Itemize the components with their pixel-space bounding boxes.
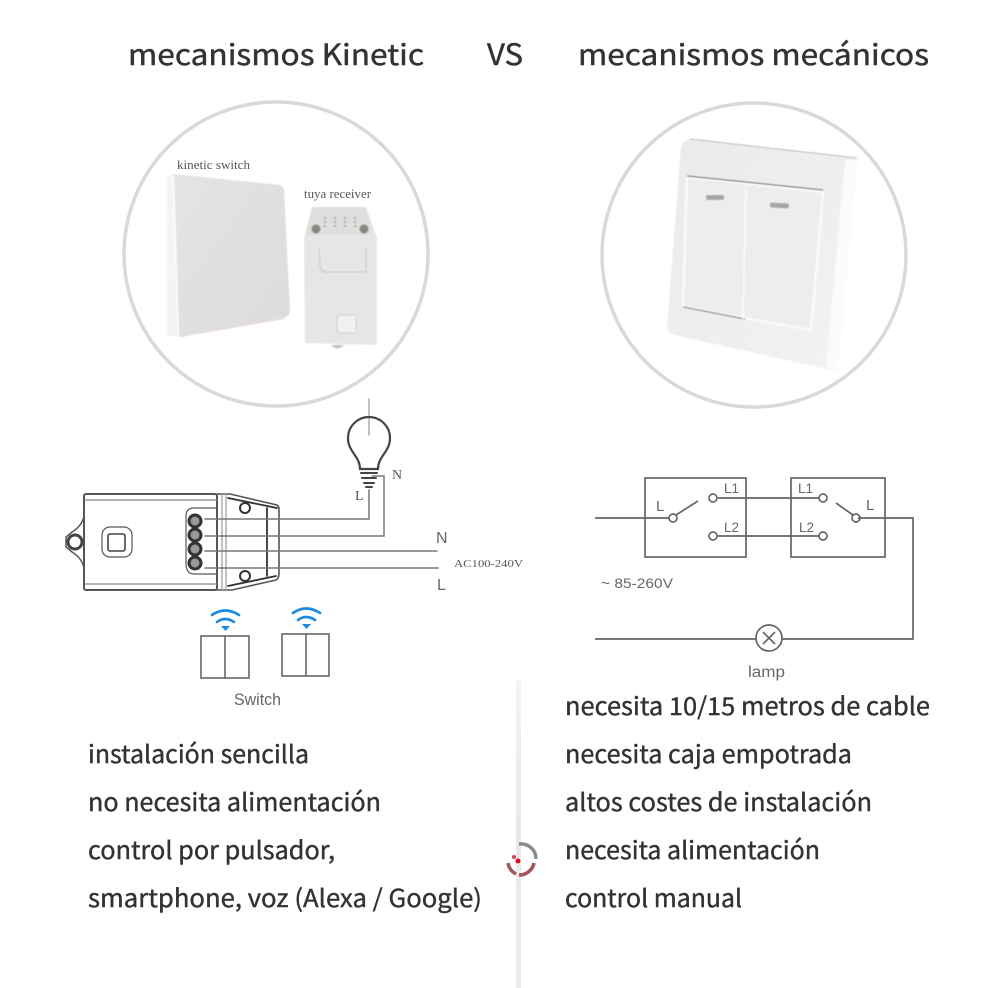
switch box left	[645, 478, 746, 557]
diagram: mechanical two-way wiring	[595, 478, 913, 651]
labels: switch terminals: L2	[724, 520, 739, 535]
label: Switch: Switch	[234, 691, 281, 709]
VS heading: VS	[487, 32, 523, 74]
icon: loading spinner	[508, 844, 536, 875]
label: bulb L: L	[355, 489, 364, 504]
text block: mechanical drawbacks: necesita caja empotrada	[565, 736, 852, 771]
panel: kinetic switch photo circle	[124, 102, 428, 406]
labels: switch terminals	[656, 481, 874, 535]
circuit wires	[595, 498, 913, 639]
labels: switch terminals: L2	[799, 520, 814, 535]
text block: kinetic benefits	[88, 736, 482, 915]
text block: mechanical drawbacks: altos costes de instalación	[565, 784, 872, 819]
icon: kinetic wall switch	[167, 174, 290, 337]
icon: light bulb	[348, 399, 390, 487]
text block: kinetic benefits: instalación sencilla	[88, 736, 309, 771]
text block: mechanical drawbacks: necesita alimentación	[565, 832, 820, 867]
labels: switch terminals: L1	[798, 481, 813, 496]
title: mecanismos mecánicos: mecanismos mecánicos	[578, 32, 929, 74]
text block: mechanical drawbacks: control manual	[565, 880, 742, 915]
labels: switch terminals: L1	[724, 481, 739, 496]
labels: switch terminals: L	[656, 498, 664, 515]
icon: wireless switch 1	[201, 610, 249, 678]
label: tuya receiver: tuya receiver	[304, 187, 372, 201]
receiver outline drawing	[66, 494, 279, 590]
icon: tuya receiver module	[304, 207, 377, 348]
label: supply N: N	[436, 530, 448, 547]
label: supply L: L	[437, 577, 446, 594]
text block: mechanical drawbacks: necesita 10/15 metros de cable	[565, 688, 930, 723]
title: mecanismos Kinetic: mecanismos Kinetic	[128, 32, 424, 74]
text block: kinetic benefits: control por pulsador,	[88, 832, 335, 867]
wires	[205, 476, 438, 568]
diagram: kinetic wiring	[66, 399, 438, 590]
text block: kinetic benefits: no necesita alimentación	[88, 784, 381, 819]
label: voltage: ~ 85-260V	[601, 575, 674, 591]
labels: switch terminals: L	[866, 497, 874, 514]
label: AC100-240V: AC100-240V	[454, 558, 523, 570]
icon: mechanical wall switch	[667, 139, 857, 370]
icon: wireless switch 2	[282, 608, 329, 676]
text block: mechanical drawbacks	[565, 688, 930, 915]
label: bulb N: N	[392, 468, 402, 483]
icon: lamp symbol	[756, 625, 782, 651]
left contact nodes	[669, 494, 717, 540]
label: lamp: lamp	[748, 664, 785, 681]
panel: mechanical switch photo circle	[602, 103, 906, 407]
switch box right	[791, 478, 885, 557]
label: kinetic switch: kinetic switch	[177, 158, 251, 172]
center divider line	[516, 680, 521, 988]
text block: kinetic benefits: smartphone, voz (Alexa / Google)	[88, 880, 482, 915]
right contact nodes	[819, 494, 860, 540]
